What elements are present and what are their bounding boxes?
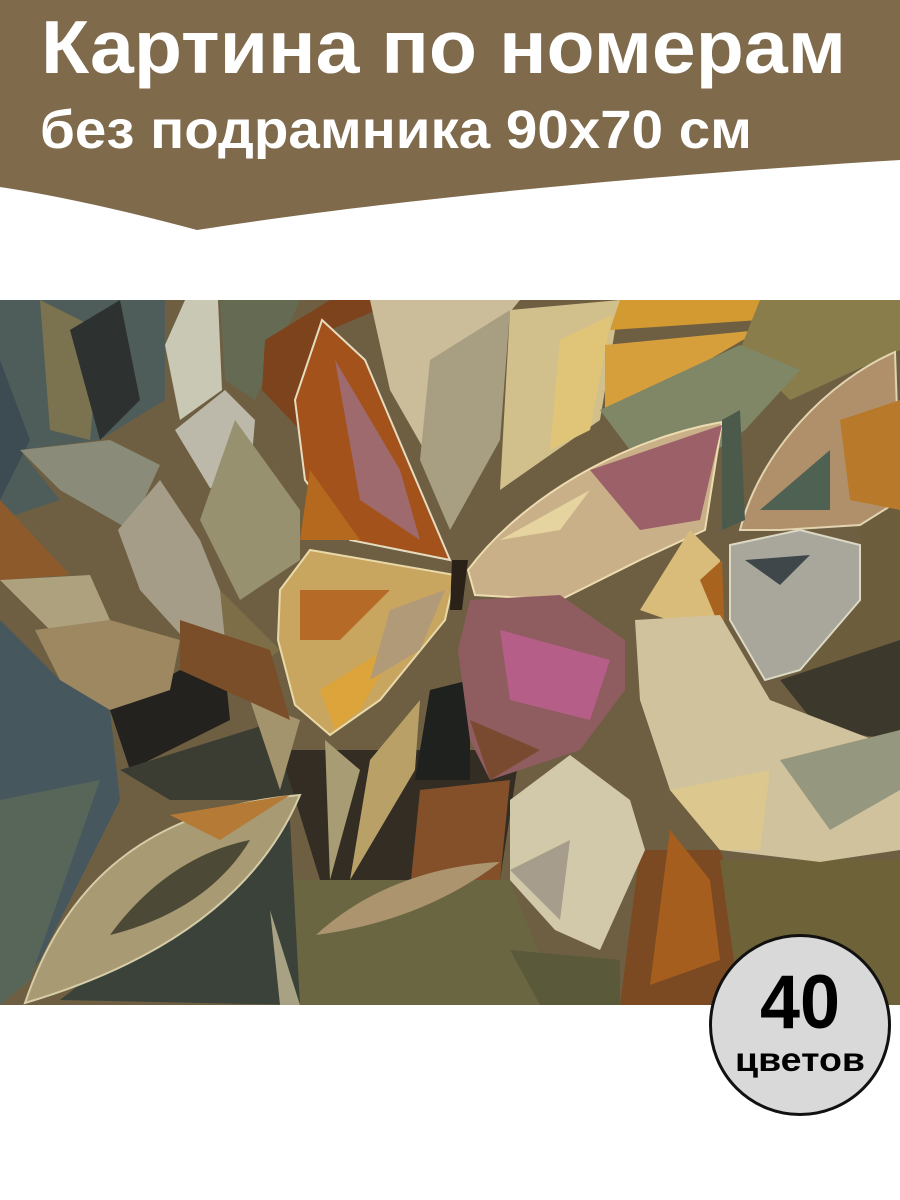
left leaf <box>25 795 300 1003</box>
left small butterfly <box>0 575 290 720</box>
top-left butterfly <box>20 300 300 665</box>
background patches <box>0 300 900 1005</box>
right butterfly <box>640 352 900 680</box>
title: Картина по номерам <box>41 5 846 89</box>
orange lower-right streak <box>650 830 720 985</box>
banner <box>0 0 900 230</box>
painting: butterflies <box>0 300 900 1005</box>
butterfly body <box>450 560 468 610</box>
central butterfly <box>278 320 722 780</box>
badge number: 40 <box>760 960 840 1045</box>
badge label: цветов <box>735 1041 865 1078</box>
badge: 40 colours <box>710 936 890 1114</box>
small hanging leaves <box>325 740 360 880</box>
subtitle: без подрамника 90x70 см <box>40 100 752 160</box>
lower right pale leaves <box>510 615 900 950</box>
lower middle leaf <box>316 862 500 935</box>
